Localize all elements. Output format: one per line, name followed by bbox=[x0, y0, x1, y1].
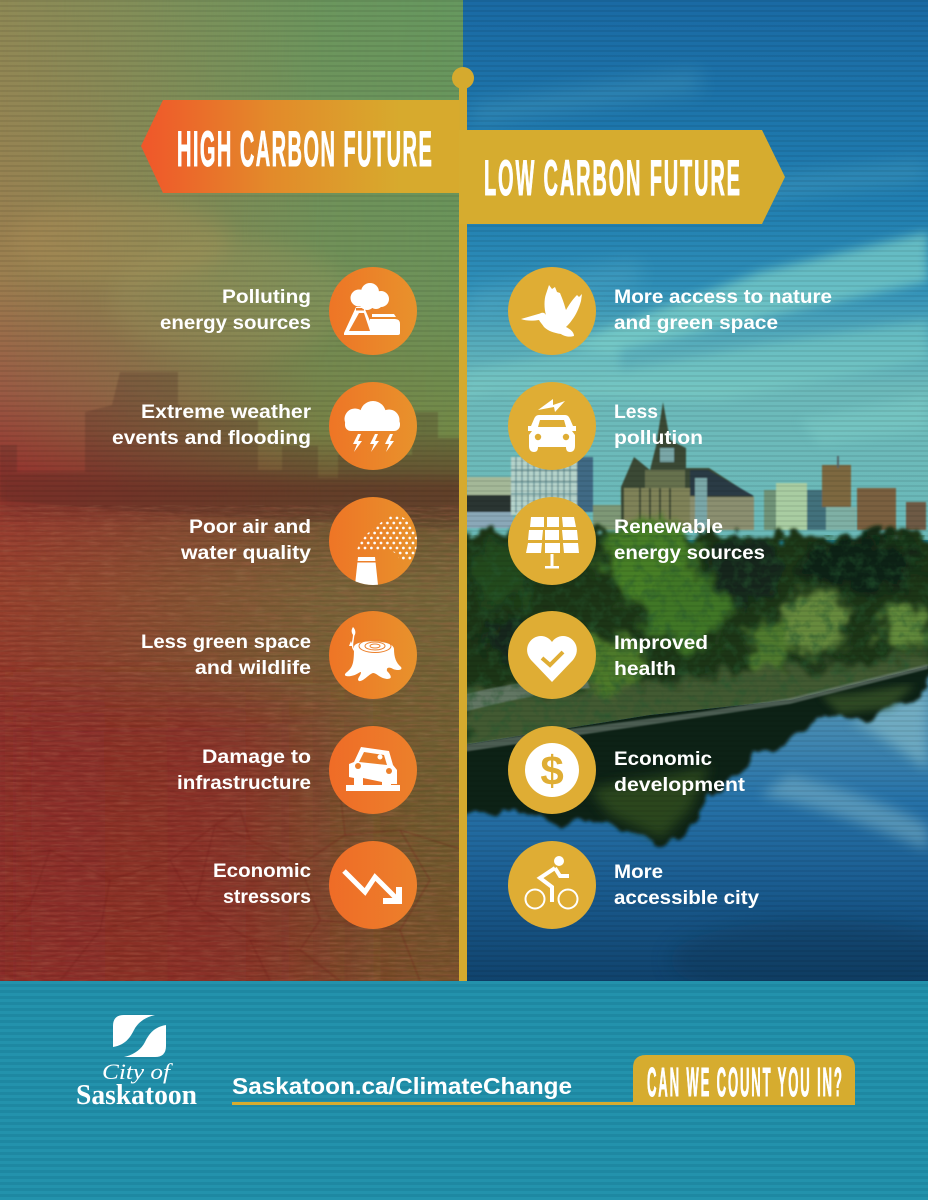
label: stressors bbox=[223, 887, 311, 908]
item: nature and green space bbox=[508, 267, 832, 355]
label: More bbox=[614, 862, 663, 883]
item: damage to infrastructure bbox=[177, 726, 417, 814]
label bbox=[177, 747, 311, 794]
label bbox=[213, 861, 311, 908]
icon: tree stump bbox=[329, 611, 417, 699]
label bbox=[614, 633, 708, 680]
item: economic development bbox=[508, 726, 746, 814]
label: energy sources bbox=[614, 543, 765, 564]
icon: heart with check bbox=[508, 611, 596, 699]
label: accessible city bbox=[614, 888, 759, 909]
item: polluting energy sources bbox=[160, 267, 417, 355]
icon: storm cloud bbox=[329, 382, 417, 470]
label bbox=[160, 287, 311, 334]
icon: falling arrow bbox=[329, 841, 417, 929]
label bbox=[141, 632, 311, 679]
icon: pelican bbox=[508, 267, 596, 355]
label: Poor air and bbox=[189, 517, 311, 538]
item: economic stressors bbox=[213, 841, 417, 929]
item: less green space and wildlife bbox=[141, 611, 417, 699]
panel: footer band bbox=[0, 981, 928, 1200]
icon: dollar coin: $ bbox=[540, 747, 564, 794]
skyline bbox=[463, 402, 926, 530]
item: more accessible city bbox=[508, 841, 759, 929]
label: and green space bbox=[614, 313, 778, 334]
label: Less bbox=[614, 402, 658, 423]
label: events and flooding bbox=[112, 428, 311, 449]
callout: can we count you in bbox=[232, 1055, 855, 1105]
label: health bbox=[614, 659, 676, 680]
label: Polluting bbox=[222, 287, 311, 308]
logo: City of Saskatoon: Saskatoon bbox=[76, 1080, 197, 1111]
item: extreme weather bbox=[112, 382, 417, 470]
icon: solar panel bbox=[508, 497, 596, 585]
panel: low carbon photo background bbox=[430, 0, 928, 1000]
trees, shore and water bbox=[467, 512, 928, 744]
icon: cyclist bbox=[508, 841, 596, 929]
icon: smokestack bbox=[329, 497, 417, 585]
label: Economic bbox=[213, 861, 311, 882]
label: Extreme weather bbox=[141, 402, 312, 423]
item: improved health bbox=[508, 611, 708, 699]
label: Economic bbox=[614, 749, 712, 770]
callout: can we count you in: CAN WE COUNT YOU IN? bbox=[647, 1060, 842, 1105]
label bbox=[614, 287, 832, 334]
signpost pole bbox=[452, 67, 474, 981]
label bbox=[614, 862, 759, 909]
label: Improved bbox=[614, 633, 708, 654]
label: energy sources bbox=[160, 313, 311, 334]
item: less pollution bbox=[508, 382, 703, 470]
item: poor air and water quality bbox=[180, 497, 417, 585]
panel: high carbon photo background bbox=[0, 0, 463, 1080]
label bbox=[180, 517, 311, 564]
sign: low carbon future: LOW CARBON FUTURE bbox=[484, 152, 740, 207]
label: Damage to bbox=[202, 747, 311, 768]
label: Renewable bbox=[614, 517, 723, 538]
label: water quality bbox=[180, 543, 311, 564]
label: More access to nature bbox=[614, 287, 832, 308]
label: development bbox=[614, 775, 746, 796]
label: and wildlife bbox=[195, 658, 311, 679]
label bbox=[112, 402, 312, 449]
label bbox=[614, 402, 703, 449]
icon: electric car bbox=[508, 382, 596, 470]
sign: low carbon future bbox=[459, 130, 785, 224]
sign: high carbon future: HIGH CARBON FUTURE bbox=[177, 123, 432, 178]
sign: high carbon future bbox=[141, 100, 459, 193]
icon: power plant bbox=[329, 267, 417, 355]
item: renewable energy sources bbox=[508, 497, 765, 585]
label: infrastructure bbox=[177, 773, 311, 794]
label bbox=[614, 749, 746, 796]
logo: City of Saskatoon: City of bbox=[102, 1059, 173, 1084]
logo: City of Saskatoon bbox=[76, 1015, 197, 1111]
website link: Saskatoon.ca/ClimateChange bbox=[232, 1073, 572, 1099]
label: pollution bbox=[614, 428, 703, 449]
icon: car on broken road bbox=[329, 726, 417, 814]
label bbox=[614, 517, 765, 564]
label: Less green space bbox=[141, 632, 311, 653]
icon: dollar coin bbox=[508, 726, 596, 814]
